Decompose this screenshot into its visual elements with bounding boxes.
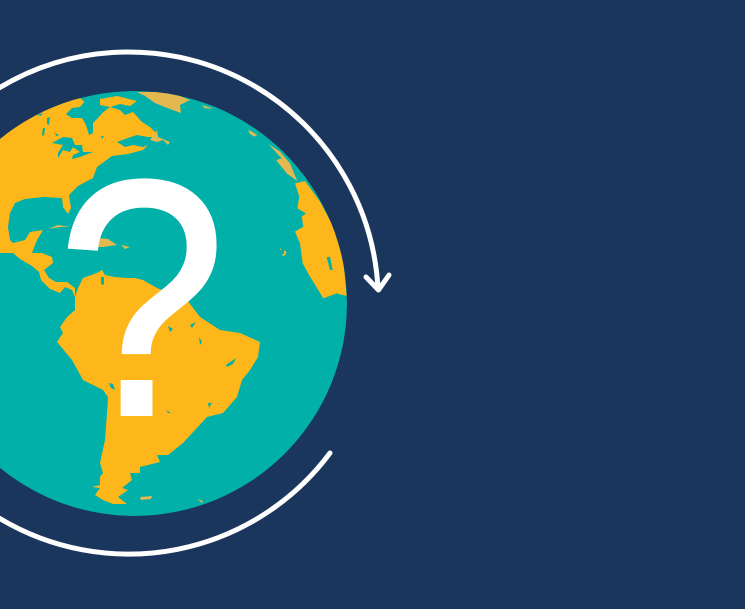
arrow head — [366, 275, 389, 290]
Hudson Bay and Great Lakes — [37, 99, 105, 159]
infographic illustration: globe with question mark — [0, 50, 392, 557]
globe — [0, 91, 347, 516]
continent: South America — [57, 270, 260, 504]
Caribbean islands — [48, 225, 130, 249]
Arctic islands — [100, 96, 137, 107]
ocean — [0, 91, 347, 516]
islands of South Atlantic — [140, 496, 203, 503]
continent: North and Central America — [0, 98, 157, 297]
continent: Africa and Europe — [180, 98, 347, 298]
question mark: ? — [57, 111, 227, 487]
rivers and lakes of South America — [101, 277, 236, 413]
rotation arrow: upper arc — [0, 52, 389, 290]
rotation arrow: lower arc — [0, 453, 330, 554]
Greenland and Maritimes — [137, 92, 190, 145]
